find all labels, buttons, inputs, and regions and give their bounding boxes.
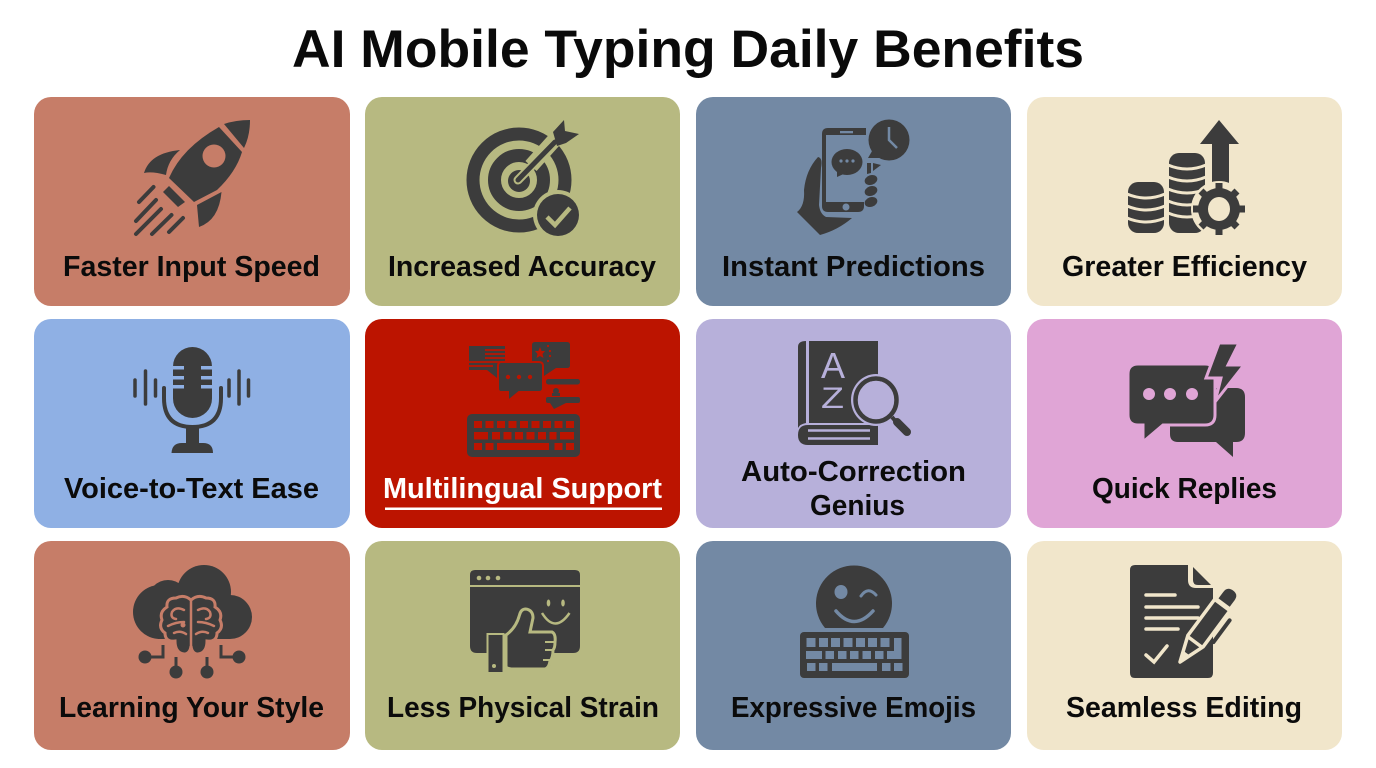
icon: winking face over keyboard	[800, 565, 909, 678]
label: Faster Input Speed	[63, 251, 320, 283]
icon: microphone with sound waves	[135, 347, 248, 453]
icon: dictionary with magnifier: Z	[821, 382, 844, 415]
label: Multilingual Support	[383, 473, 662, 505]
label: line one and two: Auto-Correction	[741, 456, 966, 488]
icon: browser window with thumbs up	[470, 570, 580, 673]
label: Expressive Emojis	[731, 692, 976, 724]
icon: coins, arrow and gear	[1127, 120, 1247, 237]
icon: document with pencil	[1130, 565, 1245, 678]
label: Instant Predictions	[722, 251, 985, 283]
label: Less Physical Strain	[387, 692, 659, 724]
icon: rocket	[136, 120, 250, 234]
icon: hand holding phone with clock bubble	[797, 120, 910, 235]
panel: increased accuracy	[365, 97, 680, 306]
label: Quick Replies	[1092, 473, 1277, 505]
panel: auto-correction genius	[696, 319, 1011, 528]
panel: instant predictions	[696, 97, 1011, 306]
icon: target with arrow and check	[473, 120, 583, 240]
label: Voice-to-Text Ease	[64, 473, 319, 505]
panel: greater efficiency	[1027, 97, 1342, 306]
panel: quick replies	[1027, 319, 1342, 528]
icon: language bubbles and keyboard	[467, 342, 580, 457]
icon: dictionary with magnifier: A	[821, 345, 845, 386]
panel: voice-to-text ease	[34, 319, 350, 528]
icon: dictionary with magnifier	[798, 341, 907, 445]
title: AI Mobile Typing Daily Benefits	[292, 20, 1084, 79]
panel: multilingual support	[365, 319, 680, 528]
panel: faster input speed	[34, 97, 350, 306]
label underline	[385, 508, 662, 510]
panel: learning your style	[34, 541, 350, 750]
label: line one and two	[741, 456, 966, 522]
label: Increased Accuracy	[388, 251, 656, 283]
label: Learning Your Style	[59, 692, 324, 724]
label: line one and two: Genius	[810, 490, 905, 522]
label: Greater Efficiency	[1062, 251, 1307, 283]
label: Seamless Editing	[1066, 692, 1302, 724]
panel: expressive emojis	[696, 541, 1011, 750]
icon: chat bubbles with lightning bolt	[1128, 343, 1245, 457]
panel: seamless editing	[1027, 541, 1342, 750]
icon: cloud brain with circuit nodes	[133, 565, 252, 678]
panel: less physical strain	[365, 541, 680, 750]
